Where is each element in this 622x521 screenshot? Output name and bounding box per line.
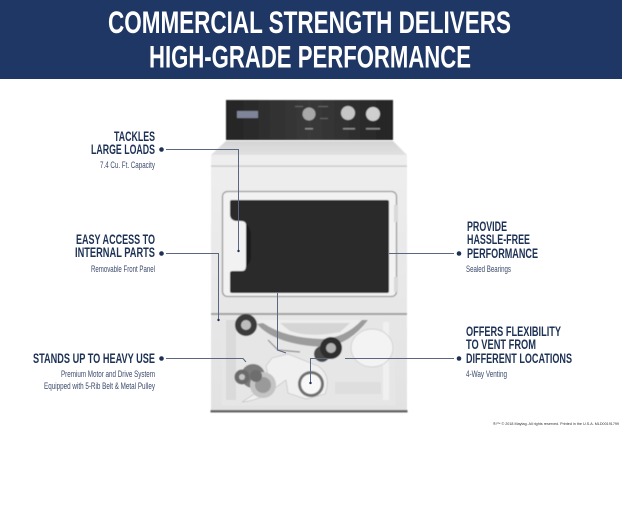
callout: heavy use: Premium Motor and Drive System — [61, 369, 155, 379]
rollers — [235, 314, 257, 336]
callout: hassle-free performance — [466, 219, 538, 274]
drum — [258, 320, 368, 345]
callout: hassle-free performance: PERFORMANCE — [467, 246, 538, 261]
pulley — [298, 371, 324, 397]
control panel — [226, 100, 393, 140]
callout: easy access — [75, 232, 155, 274]
footer legal note: ®/™ © 2018 Maytag. All rights reserved. Printed in the U.S.A. MLD00191799 — [493, 422, 619, 426]
callout: easy access: EASY ACCESS TO — [76, 232, 155, 247]
callout: venting flexibility: DIFFERENT LOCATIONS — [466, 351, 572, 366]
callout: hassle-free performance: Sealed Bearings — [466, 264, 511, 274]
blower housing — [351, 329, 393, 367]
callout: tackles large loads — [91, 129, 155, 170]
belt — [268, 340, 300, 352]
callout: hassle-free performance: PROVIDE — [467, 219, 507, 234]
motor and fan — [241, 364, 265, 388]
callout: heavy use: STANDS UP TO HEAVY USE — [33, 351, 155, 366]
callout: venting flexibility: TO VENT FROM — [466, 337, 536, 352]
leader dots — [159, 147, 461, 384]
callout: tackles large loads: LARGE LOADS — [91, 142, 155, 157]
lower access bay — [210, 313, 408, 412]
callout: tackles large loads: TACKLES — [114, 129, 155, 144]
callout: heavy use — [33, 351, 155, 391]
header banner — [0, 0, 622, 79]
leader lines — [166, 150, 454, 383]
dryer cabinet — [211, 155, 407, 411]
title — [108, 4, 511, 74]
door — [222, 192, 398, 296]
dryer top — [211, 141, 407, 167]
callout: hassle-free performance: HASSLE-FREE — [467, 232, 530, 247]
callout: easy access: Removable Front Panel — [91, 264, 155, 274]
door window — [230, 200, 389, 293]
callout: easy access: INTERNAL PARTS — [75, 245, 155, 260]
title: HIGH-GRADE PERFORMANCE — [149, 38, 471, 74]
callout: venting flexibility: OFFERS FLEXIBILITY — [466, 324, 561, 339]
callout: tackles large loads: 7.4 Cu. Ft. Capacity — [100, 160, 155, 170]
callout: venting flexibility: 4-Way Venting — [466, 369, 507, 379]
dryer illustration — [210, 100, 408, 412]
callout: heavy use: Equipped with 5-Rib Belt & Metal Pulley — [44, 381, 155, 391]
callout: venting flexibility — [466, 324, 572, 379]
